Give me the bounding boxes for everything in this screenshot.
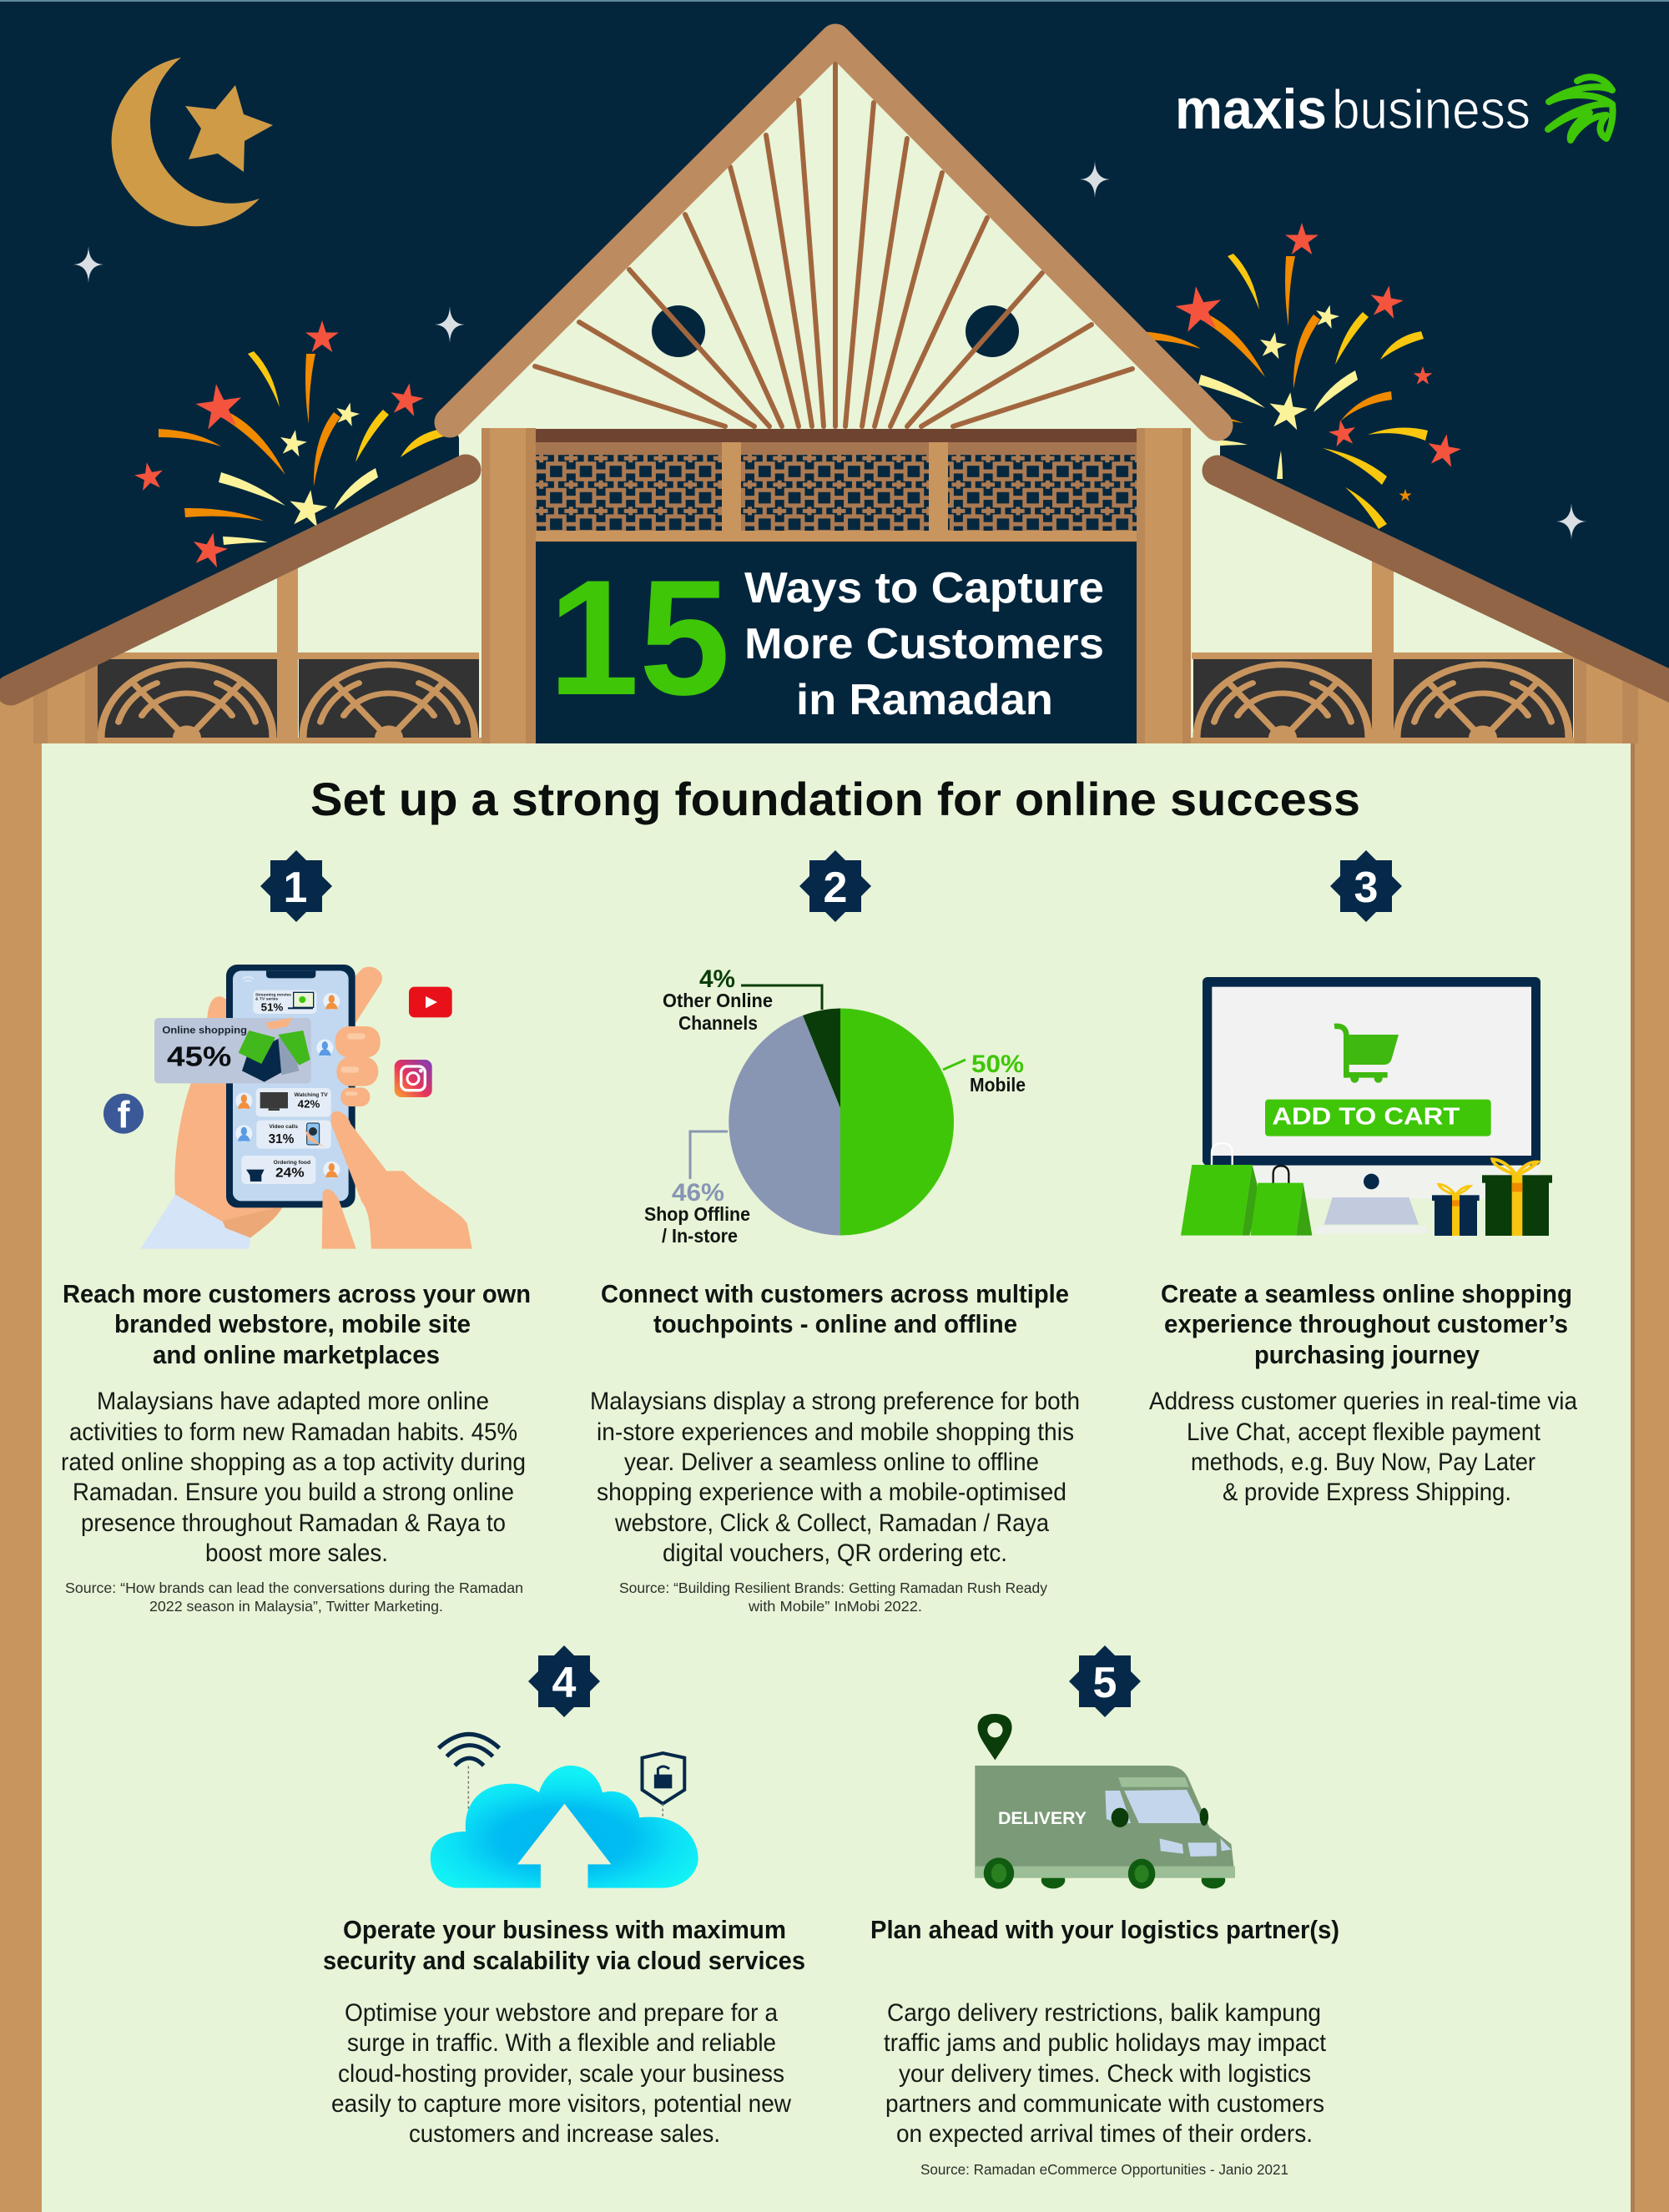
text block: step 4: cloud-hosting provider, scale your business [338,2060,784,2088]
icon: shirt sleeve [140,1195,250,1249]
icon: large gift [1482,1159,1552,1236]
text block: step 3: methods, e.g. Buy Now, Pay Later [1191,1449,1535,1476]
text block: step 5: traffic jams and public holidays may impact [884,2029,1327,2057]
badge 4: 4 [552,1659,577,1707]
text block: step 1: rated online shopping as a top activity during [61,1449,526,1476]
label: 46 percent: / In-store [662,1225,738,1247]
text block: step 4: Optimise your webstore and prepare for a [345,1999,778,2027]
icons: sparkling stars [73,161,1586,540]
content panel [42,743,1631,2212]
label: 4 percent: 4% [699,965,735,993]
van rear wheels [1041,1872,1065,1888]
label: 4 percent [663,965,822,1034]
main gable roof [450,39,1218,426]
text block: step 1: boost more sales. [205,1539,388,1567]
night sky background [0,0,1669,751]
add to cart button: ADD TO CART [1272,1103,1460,1130]
icon: security shield lock [643,1753,684,1818]
label: 50 percent: 50% [971,1051,1024,1078]
text block: step 2: webstore, Click & Collect, Ramadan / Raya [614,1509,1049,1537]
van wheels [984,1857,1014,1889]
stat chip: video calls: Video calls [269,1124,298,1130]
text block: step 5: Cargo delivery restrictions, balik kampung [887,1999,1321,2027]
icon: location pin [978,1714,1012,1760]
label: 46 percent: 46% [672,1179,724,1207]
text block: step 2: Connect with customers across multiple [601,1279,1069,1308]
stat chip: ordering food [241,1156,315,1184]
text block: step 2: Source: “Building Resilient Brands: Getting Ramadan Rush Ready [619,1580,1047,1596]
text block: step 1: Source: “How brands can lead the conversations during the Ramadan [65,1580,523,1596]
text block: step 1: branded webstore, mobile site [114,1309,471,1338]
label: 50 percent: Mobile [970,1074,1026,1096]
text block: step 1: Malaysians have adapted more online [97,1388,489,1415]
stat chip: ordering food: Ordering food [274,1160,310,1166]
heading: Set up a strong foundation for online success [310,773,1360,825]
label: 46 percent [644,1131,750,1247]
text block: step 5: partners and communicate with customers [885,2090,1324,2118]
online shopping card: 45% [167,1041,231,1072]
fireworks left [133,320,444,569]
text block: step 4: easily to capture more visitors, potential new [331,2090,791,2118]
icon: Facebook [103,1094,144,1136]
text block: step 2: in-store experiences and mobile shopping this [597,1418,1074,1446]
text block: step 1: Ramadan. Ensure you build a strong online [73,1479,514,1506]
text block: step 1: presence throughout Ramadan & Raya to [81,1509,506,1537]
text block: step 5 [870,1915,1339,2178]
icon: Facebook: f [118,1094,131,1136]
text block: step 2: shopping experience with a mobile-optimised [597,1479,1066,1506]
text block: step 3 [1149,1279,1577,1506]
text block: step 2: Malaysians display a strong preference for both [590,1388,1080,1415]
badge 5: 5 [1093,1659,1117,1707]
text block: step 1: 2022 season in Malaysia”, Twitter Marketing. [149,1598,443,1615]
illustration: hand holding phone with social stats [103,965,472,1249]
online shopping card [154,1017,311,1083]
icon: Instagram [395,1060,432,1097]
text block: step 2: touchpoints - online and offline [653,1309,1017,1338]
logo: maxisbusiness [1175,77,1613,141]
stat chip: video calls [256,1121,331,1149]
badge 5 [1069,1645,1141,1717]
fireworks right [1112,223,1463,529]
text block: step 3: Create a seamless online shopping [1161,1279,1572,1308]
van body [975,1766,1235,1878]
text block: step 3: & provide Express Shipping. [1223,1479,1511,1506]
icon: back fingers and palm [174,967,382,1237]
text block: step 2: digital vouchers, QR ordering etc. [663,1539,1007,1567]
badge 3 [1330,850,1402,922]
text block: step 4: surge in traffic. With a flexible and reliable [347,2029,776,2057]
decorative carved panel [1193,661,1372,738]
central timber frame and lattice [482,428,1191,743]
text block: step 5: Source: Ramadan eCommerce Opportunities - Janio 2021 [920,2161,1288,2178]
stat chip: ordering food: 24% [275,1166,305,1181]
lower wall timber: right [1191,561,1669,743]
text block: step 5: on expected arrival times of their orders. [896,2120,1313,2148]
stat chip: watching TV: Watching TV [295,1092,328,1098]
text block: step 3: purchasing journey [1254,1340,1480,1369]
pie chart: shopping preference [644,965,1026,1247]
label: 4 percent: Channels [678,1012,758,1034]
side walls of content area [0,743,1669,2212]
text block: step 2 [590,1279,1080,1615]
decorative carved panel [97,661,277,738]
icon: YouTube [409,987,452,1017]
stat chip: streaming: 51% [261,1001,283,1014]
online shopping card: Online shopping [162,1024,247,1035]
text block: step 3: experience throughout customer’s [1164,1309,1568,1338]
icon: wifi signal [439,1734,499,1811]
text block: step 4: Operate your business with maximum [343,1915,786,1944]
stat chip: streaming: Streaming movies [255,993,291,998]
side roofs [11,470,1669,693]
text block: step 1 [61,1279,531,1615]
text block: step 5: your delivery times. Check with logistics [899,2060,1311,2088]
title panel: in Ramadan [796,676,1053,724]
badge 2 [799,850,871,922]
phone [226,965,355,1207]
monitor [1203,977,1540,1233]
illustration: delivery van with location pin [975,1714,1235,1889]
icon: shopping bags [1181,1143,1312,1236]
stat chip: watching TV [256,1088,331,1116]
right-hand fingers [322,1026,472,1249]
badge 1 [260,850,332,922]
title panel [536,542,1137,743]
text block: step 4: customers and increase sales. [409,2120,720,2148]
text block: step 5: Plan ahead with your logistics partner(s) [870,1915,1339,1944]
stat chip: streaming [253,990,316,1014]
icon: shopping cart [1334,1026,1399,1083]
lower wall timber: left [0,568,482,743]
text block: step 4 [323,1915,805,2148]
text block: step 1: Reach more customers across your own [63,1279,531,1308]
badge 3: 3 [1354,864,1378,912]
icon: small gift [1432,1184,1480,1236]
badge 1: 1 [284,864,307,912]
title panel: 15 [548,546,730,729]
add to cart button [1265,1100,1491,1136]
avatars [235,993,340,1178]
logo: maxisbusiness: maxis [1175,78,1327,141]
stat chip: streaming: & TV series [255,997,278,1002]
van label: DELIVERY [998,1809,1087,1828]
text block: step 4: security and scalability via cloud services [323,1946,805,1975]
title panel: Ways to Capture [744,564,1104,612]
text block: step 1: activities to form new Ramadan habits. 45% [69,1418,517,1446]
text block: step 3: Address customer queries in real-time via [1149,1388,1577,1415]
icon: left gable window [652,305,705,357]
text block: step 1: and online marketplaces [153,1340,440,1369]
text block: step 2: year. Deliver a seamless online to offline [624,1449,1039,1476]
label: 50 percent [943,1051,1026,1096]
icon: cloud with arrow [431,1766,698,1888]
illustration: cloud upload with wifi and lock [431,1734,698,1888]
logo: maxisbusiness: business [1332,78,1530,140]
title panel: More Customers [744,620,1104,668]
text block: step 3: Live Chat, accept flexible payment [1187,1418,1541,1446]
house wall cream infill [0,39,1669,743]
badge 2: 2 [824,864,847,912]
stat chip: video calls: 31% [269,1132,295,1146]
label: 46 percent: Shop Offline [644,1203,750,1225]
text block: step 2: with Mobile” InMobi 2022. [748,1598,922,1615]
badge 4 [528,1645,600,1717]
stat chip: watching TV: 42% [298,1097,320,1110]
icon: crescent moon and star [112,58,273,226]
label: 4 percent: Other Online [663,990,773,1011]
gable rays [535,63,1132,426]
illustration: monitor add to cart with bags and gifts [1181,977,1552,1236]
